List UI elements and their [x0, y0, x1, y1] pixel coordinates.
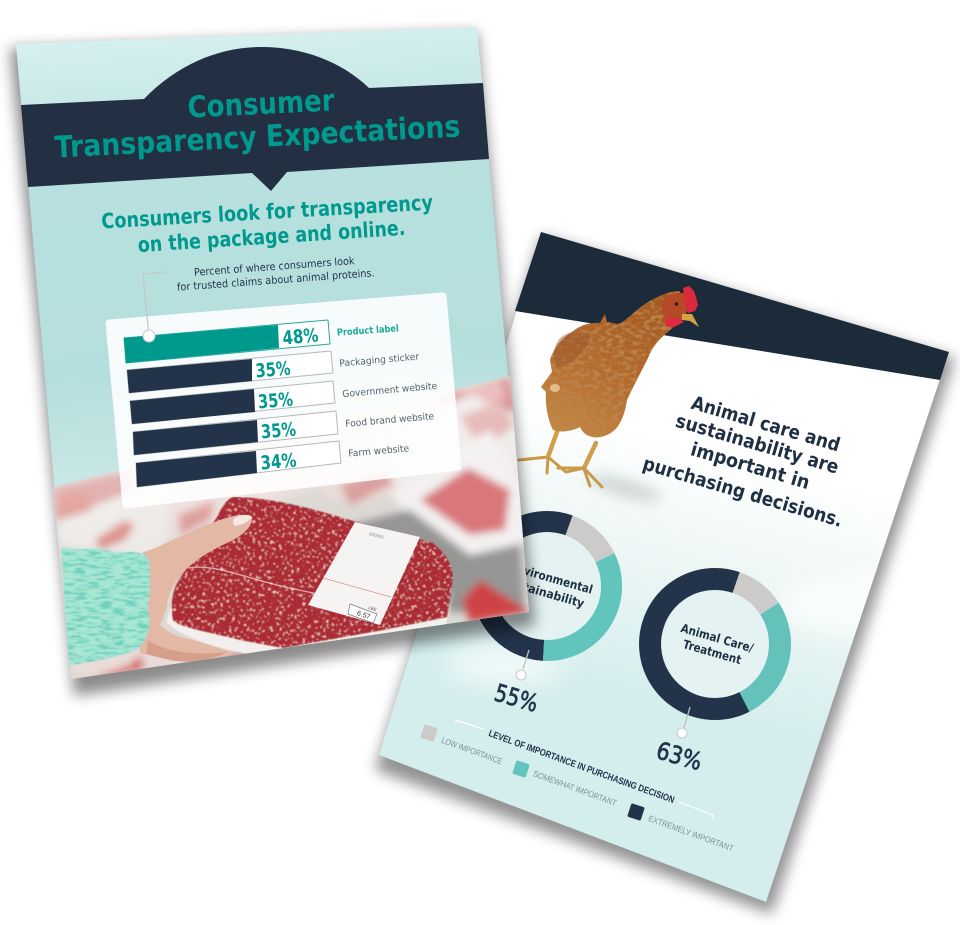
title: Transparency Expectations — [54, 109, 461, 166]
heading: animal care: purchasing decisions. — [640, 453, 845, 532]
legend item: somewhat important — [512, 760, 618, 808]
subheading: on the package and online. — [137, 216, 406, 257]
donut label: environmental: Environmental — [508, 560, 594, 597]
icon: chicken — [519, 286, 699, 487]
hand — [140, 515, 252, 662]
legend — [420, 720, 735, 853]
bar: packaging sticker 35% — [127, 351, 420, 393]
legend item: low importance: LOW IMPORTANCE — [440, 735, 504, 766]
description text: Percent of where consumers look — [194, 255, 356, 279]
ground meat package — [172, 497, 453, 648]
bar: packaging sticker 35%: Packaging sticker — [339, 352, 420, 369]
description text — [177, 255, 375, 294]
percent callout: 63%: 63% — [653, 737, 705, 776]
percent callout: 55% — [491, 650, 541, 718]
bar: food brand website 35% — [133, 411, 435, 455]
donut chart: animal care/treatment 63% — [650, 579, 780, 709]
legend: LEVEL OF IMPORTANCE IN PURCHASING DECISION — [487, 728, 676, 806]
heading: animal care: sustainability are — [673, 410, 841, 479]
donut label: animal care: Treatment — [681, 637, 743, 667]
heading: animal care: important in — [688, 438, 812, 494]
description text: for trusted claims about animal proteins. — [177, 267, 375, 294]
subheading: Consumers look for transparency — [101, 190, 434, 234]
bar: farm website 34%: Farm website — [348, 443, 410, 460]
title — [54, 83, 461, 166]
bar: product label 48%: Product label — [337, 323, 399, 339]
percent callout: 63% — [653, 707, 705, 776]
donut label: environmental — [500, 560, 594, 611]
bar: packaging sticker 35%: 35% — [255, 358, 291, 383]
bar: farm website 34% — [136, 441, 410, 487]
bar: food brand website 35%: Food brand website — [345, 411, 435, 430]
heading: animal care: Animal care and — [689, 392, 843, 456]
panel: bar chart card — [109, 296, 458, 505]
meat tray — [166, 591, 454, 654]
bar: government website 35%: Government website — [342, 381, 438, 400]
photo: hand holding ground meat in supermarket — [40, 370, 540, 690]
bar: product label 48% — [124, 320, 399, 363]
top navy band — [515, 232, 949, 380]
price label: 6.57 — [356, 610, 371, 621]
header banner — [21, 47, 489, 191]
legend item: low importance — [420, 724, 504, 766]
subheading — [101, 190, 434, 257]
price label: LBS — [368, 605, 377, 612]
price label — [308, 522, 420, 625]
bar: food brand website 35%: 35% — [260, 419, 297, 444]
bar: product label 48%: 48% — [282, 324, 319, 350]
photo fade — [53, 376, 513, 536]
sweater sleeve — [61, 547, 150, 666]
legend item: extremely important — [627, 803, 735, 853]
legend item: extremely important: EXTREMELY IMPORTANT — [647, 813, 735, 853]
legend item: somewhat important: SOMEWHAT IMPORTANT — [532, 768, 618, 808]
donut chart: environmental sustainability 55% — [482, 521, 612, 650]
donut label: animal care: Animal Care/ — [679, 621, 756, 655]
title: Consumer — [187, 83, 335, 126]
percent callout: 55%: 55% — [491, 679, 541, 718]
donut label: environmental: Sustainability — [500, 574, 586, 611]
price label: 000000 — [368, 531, 385, 540]
bar: government website 35%: 35% — [257, 389, 294, 414]
connector from text to top bar — [143, 272, 165, 342]
page: animal care and sustainability (back sheet) — [375, 232, 955, 914]
bar: farm website 34%: 34% — [260, 449, 297, 475]
chicken shadow — [586, 470, 664, 506]
bar: government website 35% — [130, 381, 438, 424]
heading: animal care — [640, 392, 845, 532]
page: consumer transparency expectations (front sheet) — [10, 27, 540, 696]
